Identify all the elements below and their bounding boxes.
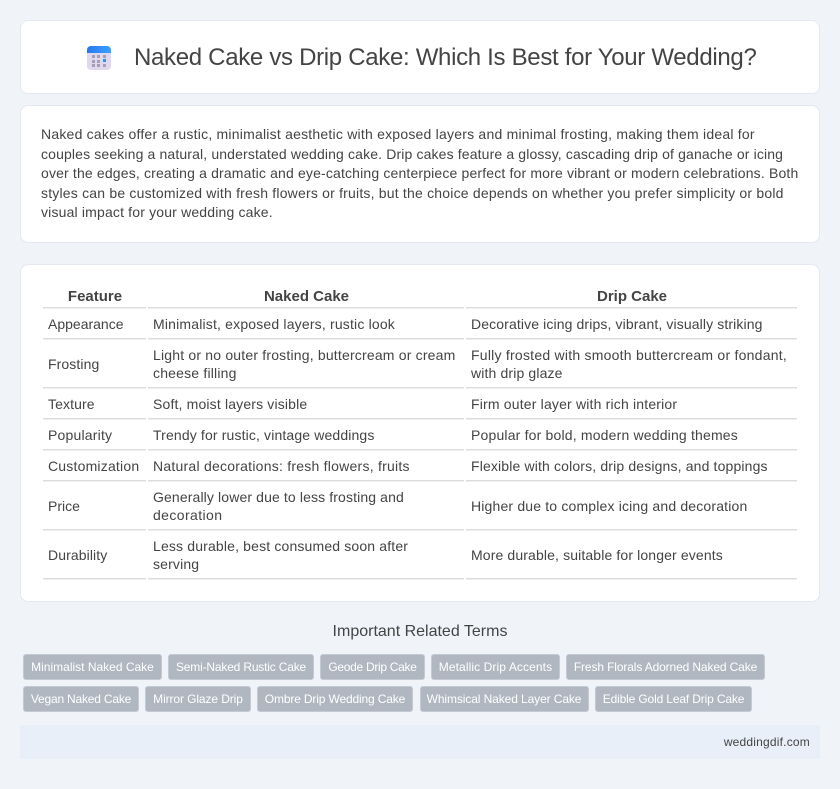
tag: Vegan Naked Cake <box>31 692 131 706</box>
tag: Fresh Florals Adorned Naked Cake <box>574 660 757 674</box>
tag <box>431 654 560 680</box>
tag <box>420 686 588 712</box>
tag: Edible Gold Leaf Drip Cake <box>603 692 744 706</box>
panel: comparison table <box>20 264 820 602</box>
tag <box>320 654 425 680</box>
row: Price: decoration <box>153 507 222 523</box>
panel: intro text <box>20 105 820 243</box>
tag <box>595 686 752 712</box>
text block: intro paragraph: over the edges, creating a dramatic and eye-catching centerpiece perfect for more vibrant or modern celebrations. Both <box>41 165 798 181</box>
row: Appearance: Appearance <box>48 316 124 332</box>
tag: Whimsical Naked Layer Cake <box>427 692 581 706</box>
row: Frosting: Fully frosted with smooth buttercream or fondant, <box>471 347 787 363</box>
row: Price <box>48 489 747 523</box>
text block: intro paragraph: couples seeking a natural, understated wedding cake. Drip cakes feature a glossy, cascading drip of ganache or icing <box>41 146 783 162</box>
text block: intro paragraph: visual impact for your wedding cake. <box>41 204 273 220</box>
row: Durability: Durability <box>48 547 107 563</box>
tag <box>23 686 139 712</box>
title: Naked Cake vs Drip Cake: Which Is Best for Your Wedding? <box>134 44 756 71</box>
row: Customization: Customization <box>48 458 139 474</box>
row: Appearance: Minimalist, exposed layers, rustic look <box>153 316 395 332</box>
table header: Drip Cake <box>597 288 667 305</box>
tag <box>23 654 162 680</box>
tags: related terms <box>23 654 765 712</box>
row: Texture <box>48 396 677 412</box>
tag: Geode Drip Cake <box>328 660 417 674</box>
tag <box>566 654 765 680</box>
row: Popularity: Trendy for rustic, vintage weddings <box>153 427 374 443</box>
row: Price: Price <box>48 498 80 514</box>
row: Price: Generally lower due to less frosting and <box>153 489 404 505</box>
row: Frosting: cheese filling <box>153 365 237 381</box>
row: Texture: Soft, moist layers visible <box>153 396 307 412</box>
row: Frosting: Light or no outer frosting, buttercream or cream <box>153 347 455 363</box>
row: Durability <box>48 538 723 572</box>
row: Popularity: Popular for bold, modern wedding themes <box>471 427 738 443</box>
row: Frosting <box>48 347 787 381</box>
table header: Naked Cake <box>264 288 349 305</box>
row: Appearance: Decorative icing drips, vibrant, visually striking <box>471 316 763 332</box>
row: Texture: Firm outer layer with rich interior <box>471 396 677 412</box>
heading: related terms: Important Related Terms <box>333 623 507 640</box>
row: Durability: More durable, suitable for longer events <box>471 547 723 563</box>
panel: title header <box>20 20 820 94</box>
tag: Semi-Naked Rustic Cake <box>176 660 306 674</box>
text block: intro paragraph: Naked cakes offer a rustic, minimalist aesthetic with exposed layers and minimal frosting, making them ideal for <box>41 126 755 142</box>
row: Durability: Less durable, best consumed soon after <box>153 538 408 554</box>
tag <box>257 686 413 712</box>
row: Price: Higher due to complex icing and decoration <box>471 498 747 514</box>
row: Customization: Natural decorations: fresh flowers, fruits <box>153 458 410 474</box>
tag: Minimalist Naked Cake <box>31 660 154 674</box>
text block: intro paragraph <box>41 126 798 220</box>
text block: intro paragraph: styles can be customized with fresh flowers or fruits, but the choice depends on whether you prefer simplicity or bold <box>41 184 784 200</box>
icon: calendar <box>87 46 111 70</box>
tag <box>168 654 314 680</box>
row: Frosting: with drip glaze <box>471 365 563 381</box>
row: Popularity: Popularity <box>48 427 112 443</box>
row: Frosting: Frosting <box>48 356 99 372</box>
row: Customization: Flexible with colors, drip designs, and toppings <box>471 458 768 474</box>
footer source text: weddingdif.com <box>724 735 810 749</box>
row: Appearance <box>48 316 763 332</box>
tag: Mirror Glaze Drip <box>153 692 243 706</box>
row: Texture: Texture <box>48 396 95 412</box>
table header: Feature <box>68 288 122 305</box>
table header <box>68 288 667 305</box>
tag: Metallic Drip Accents <box>439 660 552 674</box>
tag: Ombre Drip Wedding Cake <box>265 692 405 706</box>
row: Popularity <box>48 427 738 443</box>
row: Customization <box>48 458 768 474</box>
tag <box>145 686 251 712</box>
footer <box>20 725 820 759</box>
row: Durability: serving <box>153 556 199 572</box>
